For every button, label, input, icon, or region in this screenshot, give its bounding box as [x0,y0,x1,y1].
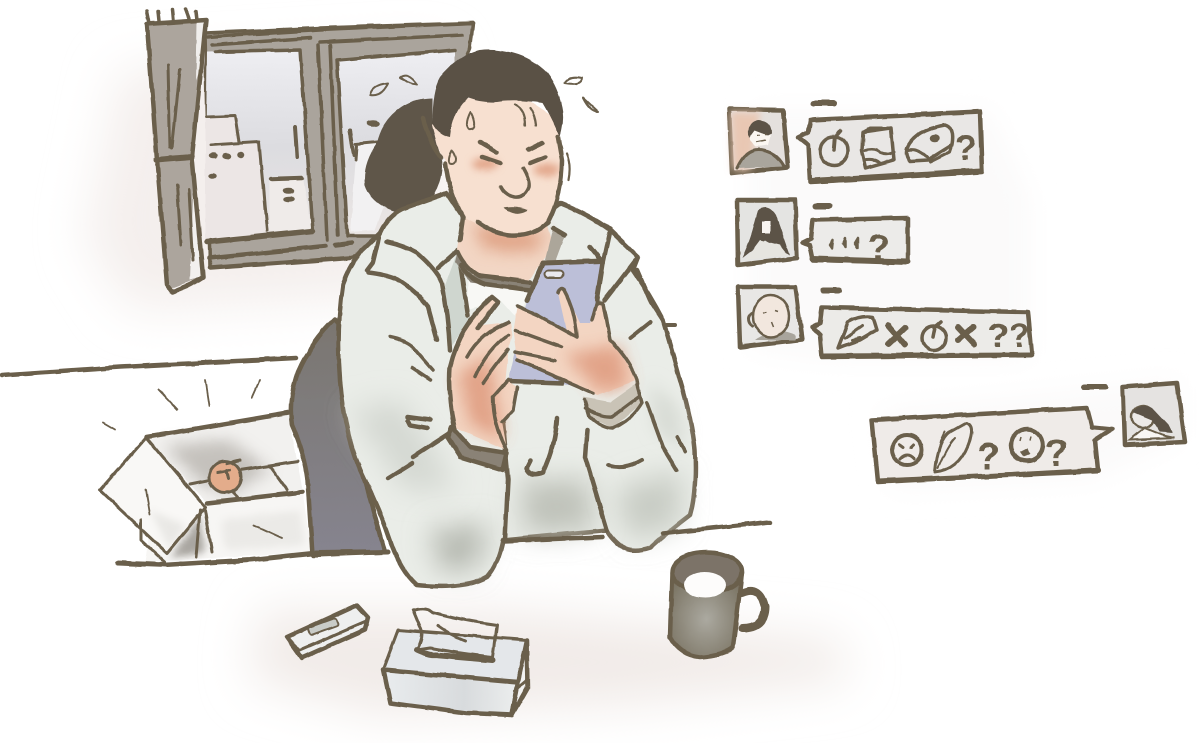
cuffs [448,383,642,470]
avatar 2 [737,200,797,265]
box front [145,492,312,562]
dash [816,203,830,209]
window [205,23,473,268]
question marks: ?? [988,317,1030,355]
open box with orange [100,380,312,562]
desk front line [117,552,388,565]
avatar 4 [1123,383,1185,445]
back table line [2,358,296,375]
left cuff [448,427,507,470]
jacket lines [367,230,685,540]
shirt collar [455,250,535,290]
phone [508,260,603,385]
window frame [205,23,473,268]
icon: fish/leaf [838,317,877,348]
bubble 3 [812,308,1032,357]
left window pane [205,50,313,243]
chat thread [729,103,1185,482]
bubble 4 [872,408,1112,482]
question mark: ? [977,436,1000,478]
icon: leaf [935,423,972,472]
jacket lining [445,250,470,345]
icon: steak [906,125,953,162]
jacket shading [350,380,685,570]
woman [339,49,695,586]
message 2 [737,200,908,268]
sweat drops [370,76,598,112]
icon: apple [820,131,848,165]
tissue [413,608,497,657]
face [370,76,598,240]
window frame lines [207,23,473,268]
tissue box [383,608,528,715]
message 3 [738,287,1032,357]
message 1 [729,103,982,182]
ponytail [364,98,442,212]
table line right [503,522,770,541]
neck [455,215,565,290]
dash [814,100,834,106]
dots and question: ? [868,227,890,268]
avatar 1 [729,109,788,173]
bubble 1 [798,112,982,182]
jacket body [339,193,695,586]
icon: milk carton [862,128,894,168]
bubble 2 [803,218,908,262]
avatar 3 [738,287,802,347]
question mark: ? [955,127,977,168]
dash [823,287,839,293]
right hand [513,288,639,395]
left hand [450,297,517,450]
cross 2 [958,327,974,344]
message 4 [872,383,1185,482]
curtain [147,9,206,292]
dots and question [830,227,890,268]
hair [432,49,563,137]
icon: sad face [892,435,922,465]
t-shirt [468,275,530,320]
icon: surprised face [1011,429,1043,461]
question mark: ? [1045,433,1068,475]
icon: apple small [922,322,946,350]
chair [291,319,385,555]
right cuff [583,383,642,428]
box interior [147,413,303,503]
right window pane [337,50,455,236]
mug [670,552,765,657]
stapler [287,605,368,658]
box flap [100,438,205,553]
orange [209,460,241,493]
cross 1 [888,325,906,345]
buildings outside [205,116,398,242]
dash [1084,384,1105,390]
